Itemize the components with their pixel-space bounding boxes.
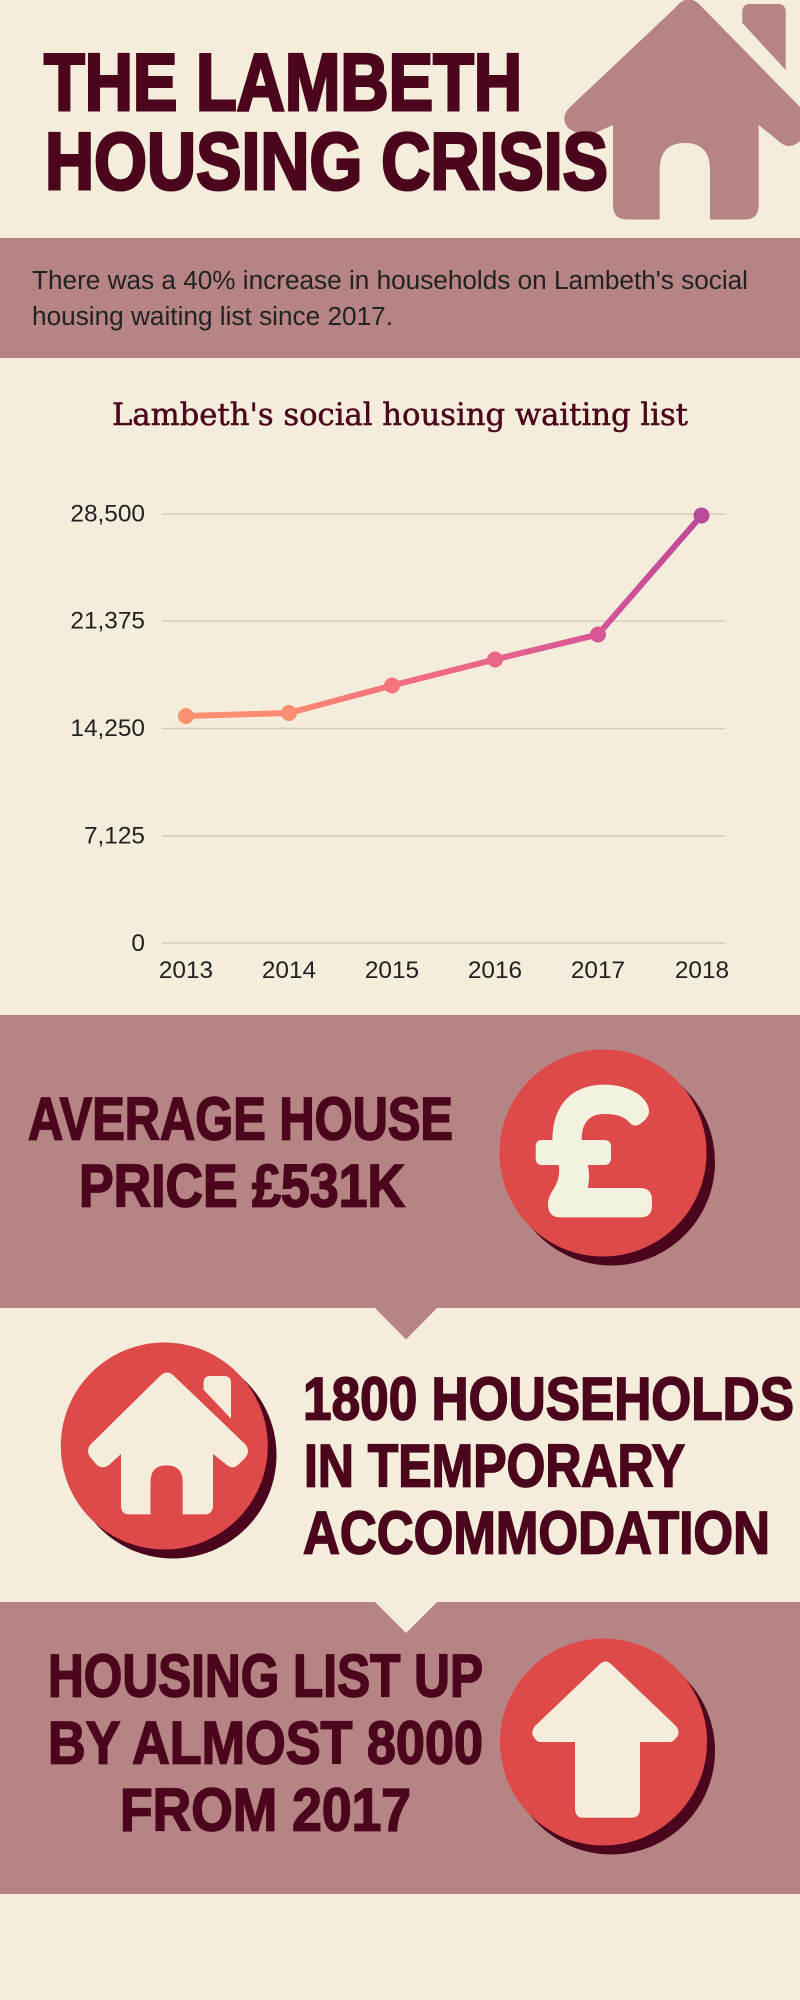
x axis labels (159, 957, 729, 984)
stat text: house price (28, 1086, 453, 1220)
panel: temporary accommodation (61, 1342, 794, 1566)
y axis labels: 0 (131, 930, 145, 957)
x axis labels: 2013 (159, 957, 213, 984)
y axis labels: 21,375 (70, 608, 145, 634)
stat text: housing list: HOUSING LIST UP (48, 1642, 483, 1710)
y axis labels (70, 500, 145, 957)
icon: up arrow in red circle (500, 1638, 715, 1854)
icon: large house (564, 0, 800, 219)
title (44, 38, 608, 207)
y axis labels: 14,250 (70, 715, 145, 742)
icon: pound in red circle (500, 1050, 715, 1266)
y axis labels: 28,500 (70, 500, 145, 528)
x axis labels: 2014 (262, 957, 316, 984)
stat text: households: IN TEMPORARY (304, 1432, 685, 1500)
stat text: housing list: FROM 2017 (120, 1776, 411, 1844)
data line (186, 516, 702, 716)
intro text: There was a 40% increase in households on Lambeth's social (32, 267, 748, 295)
stat text: house price: PRICE £531K (79, 1152, 405, 1220)
y axis labels: 7,125 (84, 822, 145, 850)
title: HOUSING CRISIS (45, 117, 608, 207)
intro text: housing waiting list since 2017. (32, 303, 393, 331)
data points (178, 508, 710, 724)
x axis labels: 2018 (675, 957, 729, 984)
panel: average house price (0, 1015, 800, 1340)
stat text: households (303, 1366, 794, 1566)
x axis labels: 2015 (365, 957, 419, 984)
title: THE LAMBETH (44, 38, 522, 128)
panel: housing list increase (0, 1602, 800, 1894)
icon: house in red circle (61, 1342, 276, 1558)
chart heading: Lambeth's social housing waiting list (112, 398, 689, 433)
stat text: housing list (48, 1642, 483, 1844)
line chart: waiting list (70, 500, 729, 984)
x axis labels: 2017 (571, 957, 625, 984)
x axis labels: 2016 (468, 957, 522, 984)
stat text: housing list: BY ALMOST 8000 (48, 1710, 483, 1776)
panel: intro band (0, 238, 800, 358)
stat text: house price: AVERAGE HOUSE (28, 1086, 453, 1152)
